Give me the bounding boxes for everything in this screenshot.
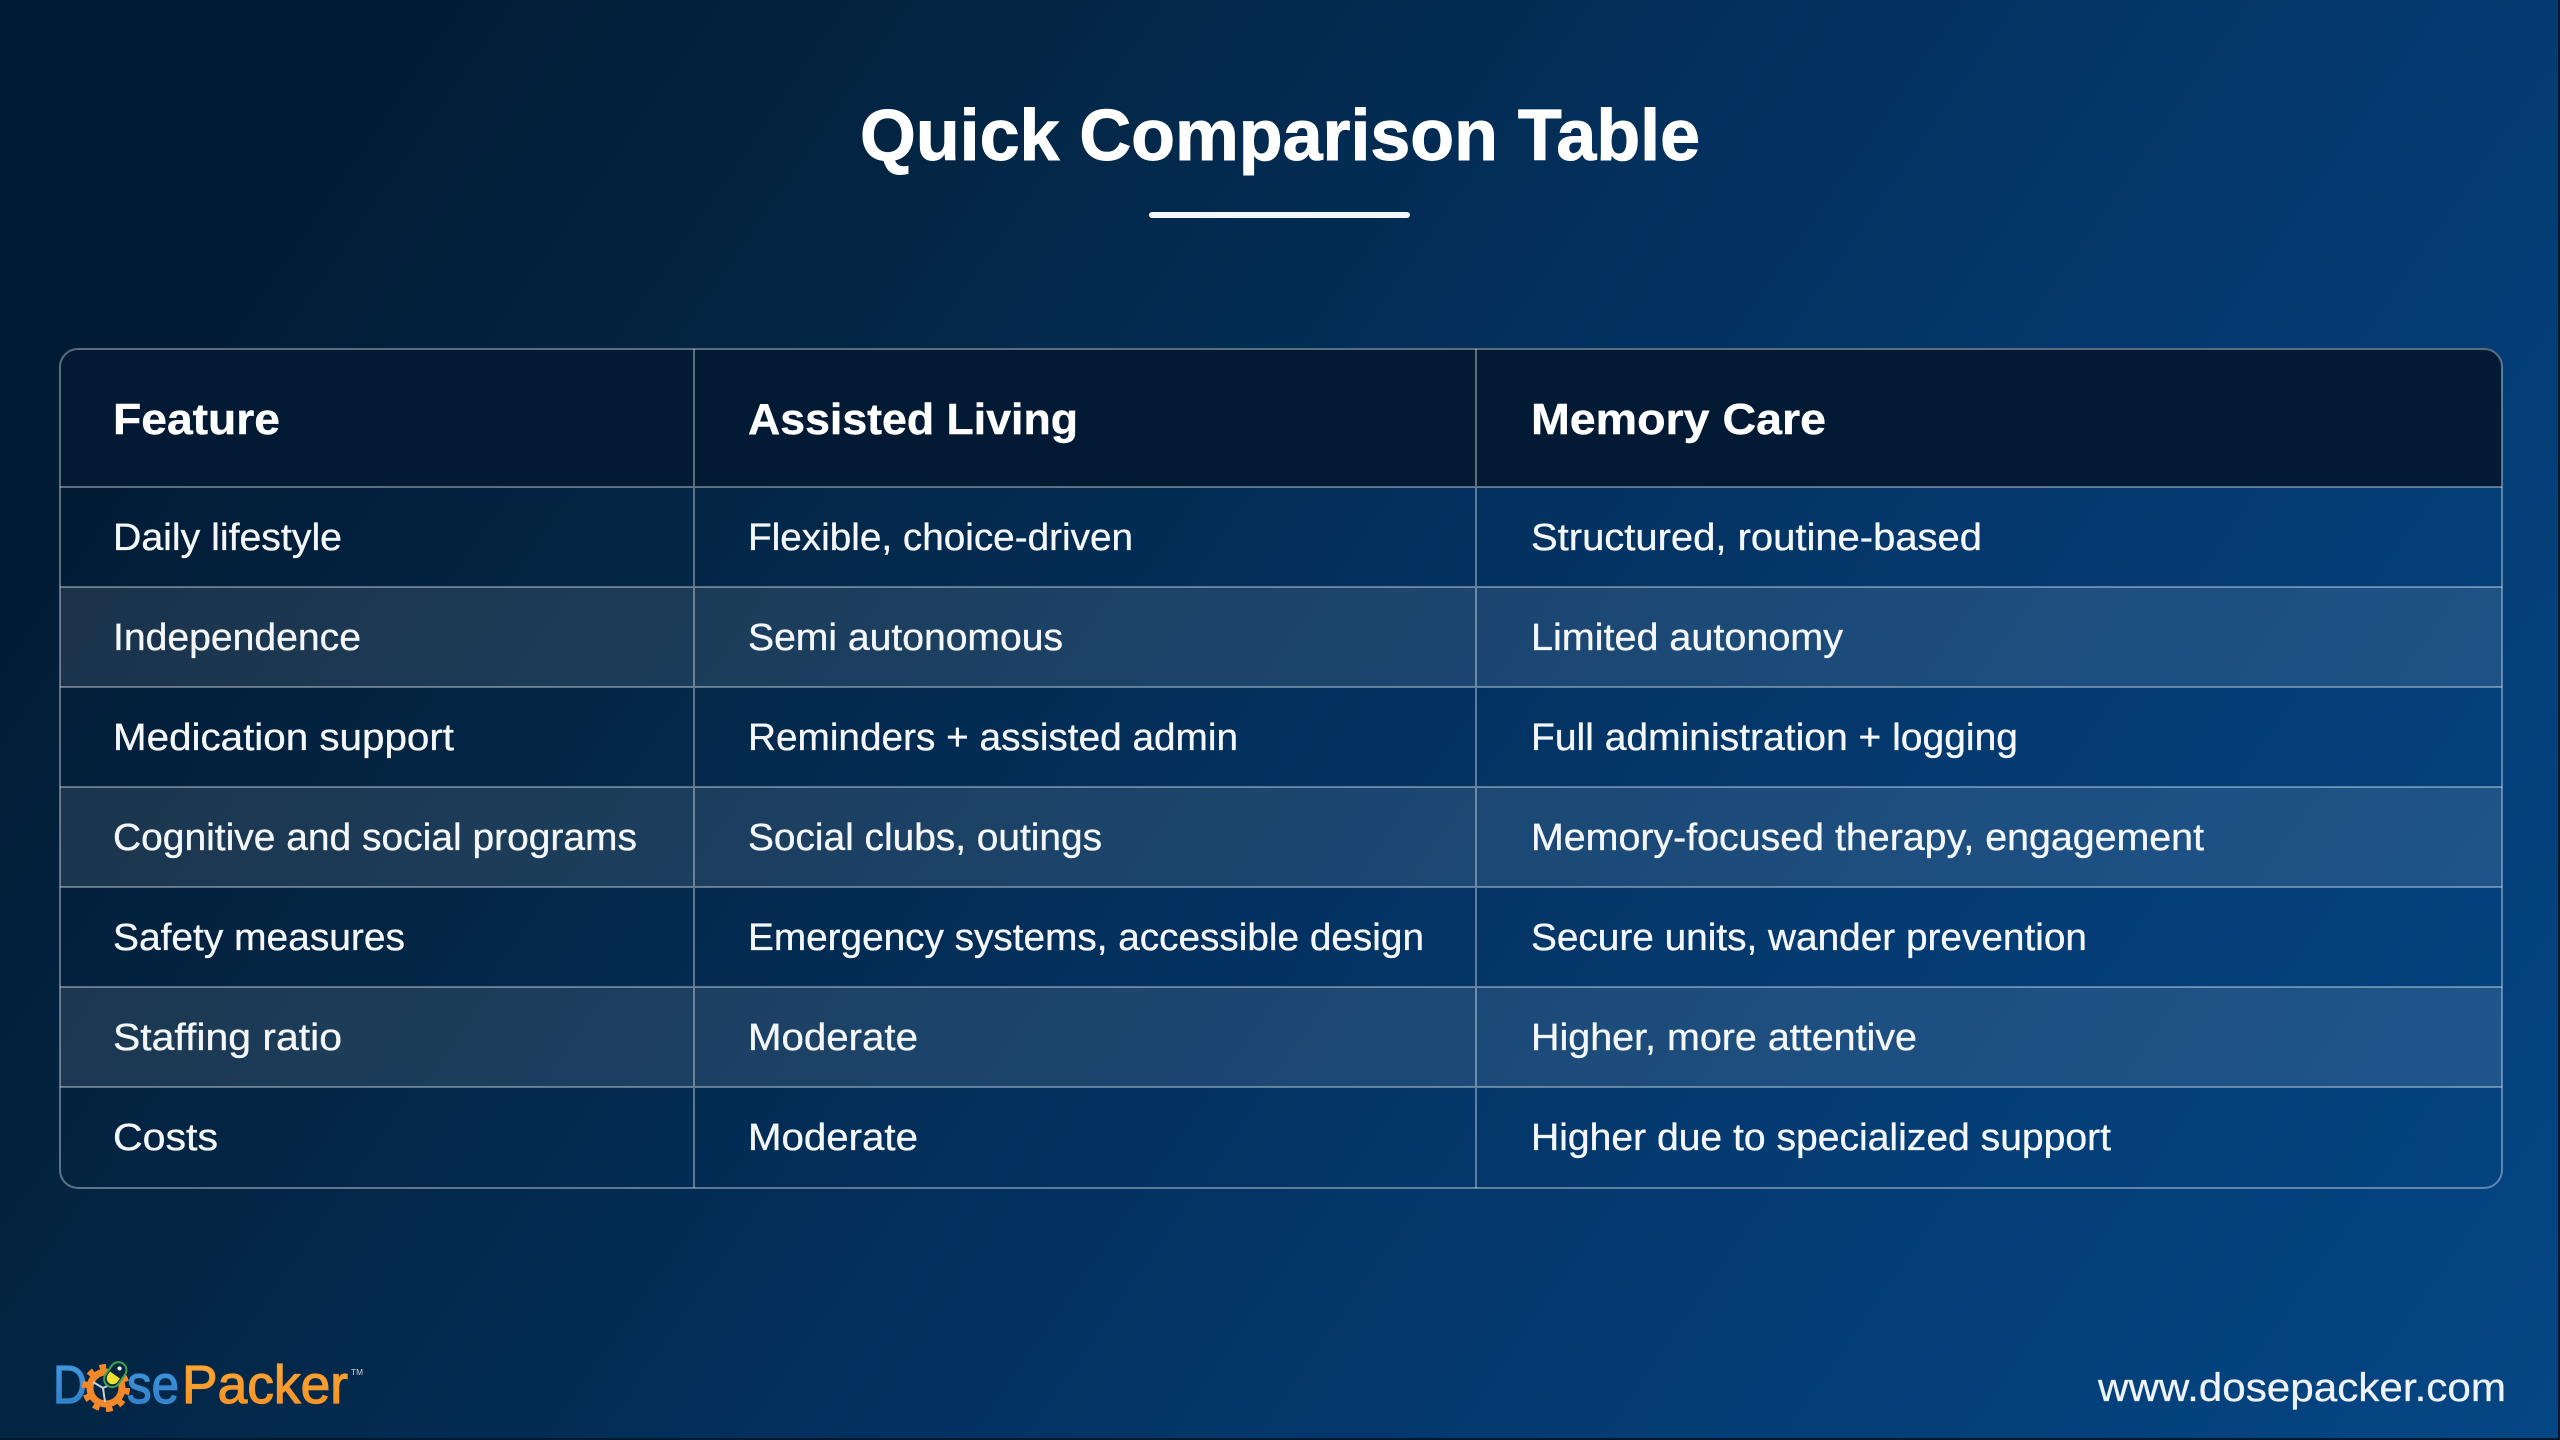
logo: DosePacker — [53, 1355, 363, 1415]
row: medication support: Reminders + assisted admin — [748, 717, 1238, 759]
row: costs — [113, 1117, 2111, 1159]
title underline — [1149, 212, 1410, 218]
row: daily lifestyle: Daily lifestyle — [113, 517, 342, 559]
logo: DosePacker: Packer — [182, 1355, 348, 1415]
row: costs: Moderate — [748, 1117, 918, 1159]
row: safety measures — [113, 917, 2087, 959]
row: cognitive and social programs: Social clubs, outings — [748, 817, 1102, 859]
row: daily lifestyle: Structured, routine-based — [1531, 517, 1982, 559]
row: independence: Independence — [113, 617, 361, 659]
row: medication support — [113, 717, 2018, 759]
row: safety measures: Secure units, wander prevention — [1531, 917, 2087, 959]
row: daily lifestyle: Flexible, choice-driven — [748, 517, 1133, 559]
icon: gear with capsule — [85, 1359, 130, 1409]
table header row — [113, 395, 1826, 444]
row: safety measures: Emergency systems, accessible design — [748, 917, 1424, 959]
row: staffing ratio: Staffing ratio — [113, 1017, 342, 1059]
row: medication support: Full administration + logging — [1531, 717, 2018, 759]
logo: DosePacker: TM — [351, 1368, 363, 1377]
row: cognitive and social programs — [113, 817, 2204, 859]
row: medication support: Medication support — [113, 717, 454, 759]
row: independence — [113, 617, 1843, 659]
row: cognitive and social programs: Cognitive and social programs — [113, 817, 637, 859]
title: Quick Comparison Table — [860, 96, 1700, 176]
row: daily lifestyle — [113, 517, 1982, 559]
row: staffing ratio: Moderate — [748, 1017, 918, 1059]
row: independence: Limited autonomy — [1531, 617, 1843, 659]
website url: www.dosepacker.com — [2097, 1366, 2506, 1410]
table header row: Assisted Living — [748, 395, 1078, 444]
row: independence: Semi autonomous — [748, 617, 1063, 659]
row: cognitive and social programs: Memory-focused therapy, engagement — [1531, 817, 2204, 859]
row: costs: Higher due to specialized support — [1531, 1117, 2111, 1159]
row: safety measures: Safety measures — [113, 917, 405, 959]
table header row: Feature — [113, 395, 280, 444]
table header row: Memory Care — [1531, 395, 1826, 444]
row: staffing ratio — [113, 1017, 1917, 1059]
logo: DosePacker: se — [127, 1355, 179, 1415]
logo: DosePacker: D — [53, 1355, 87, 1415]
table row backgrounds — [60, 348, 2502, 1087]
comparison table — [60, 348, 2502, 1188]
row: staffing ratio: Higher, more attentive — [1531, 1017, 1917, 1059]
row: costs: Costs — [113, 1117, 218, 1159]
